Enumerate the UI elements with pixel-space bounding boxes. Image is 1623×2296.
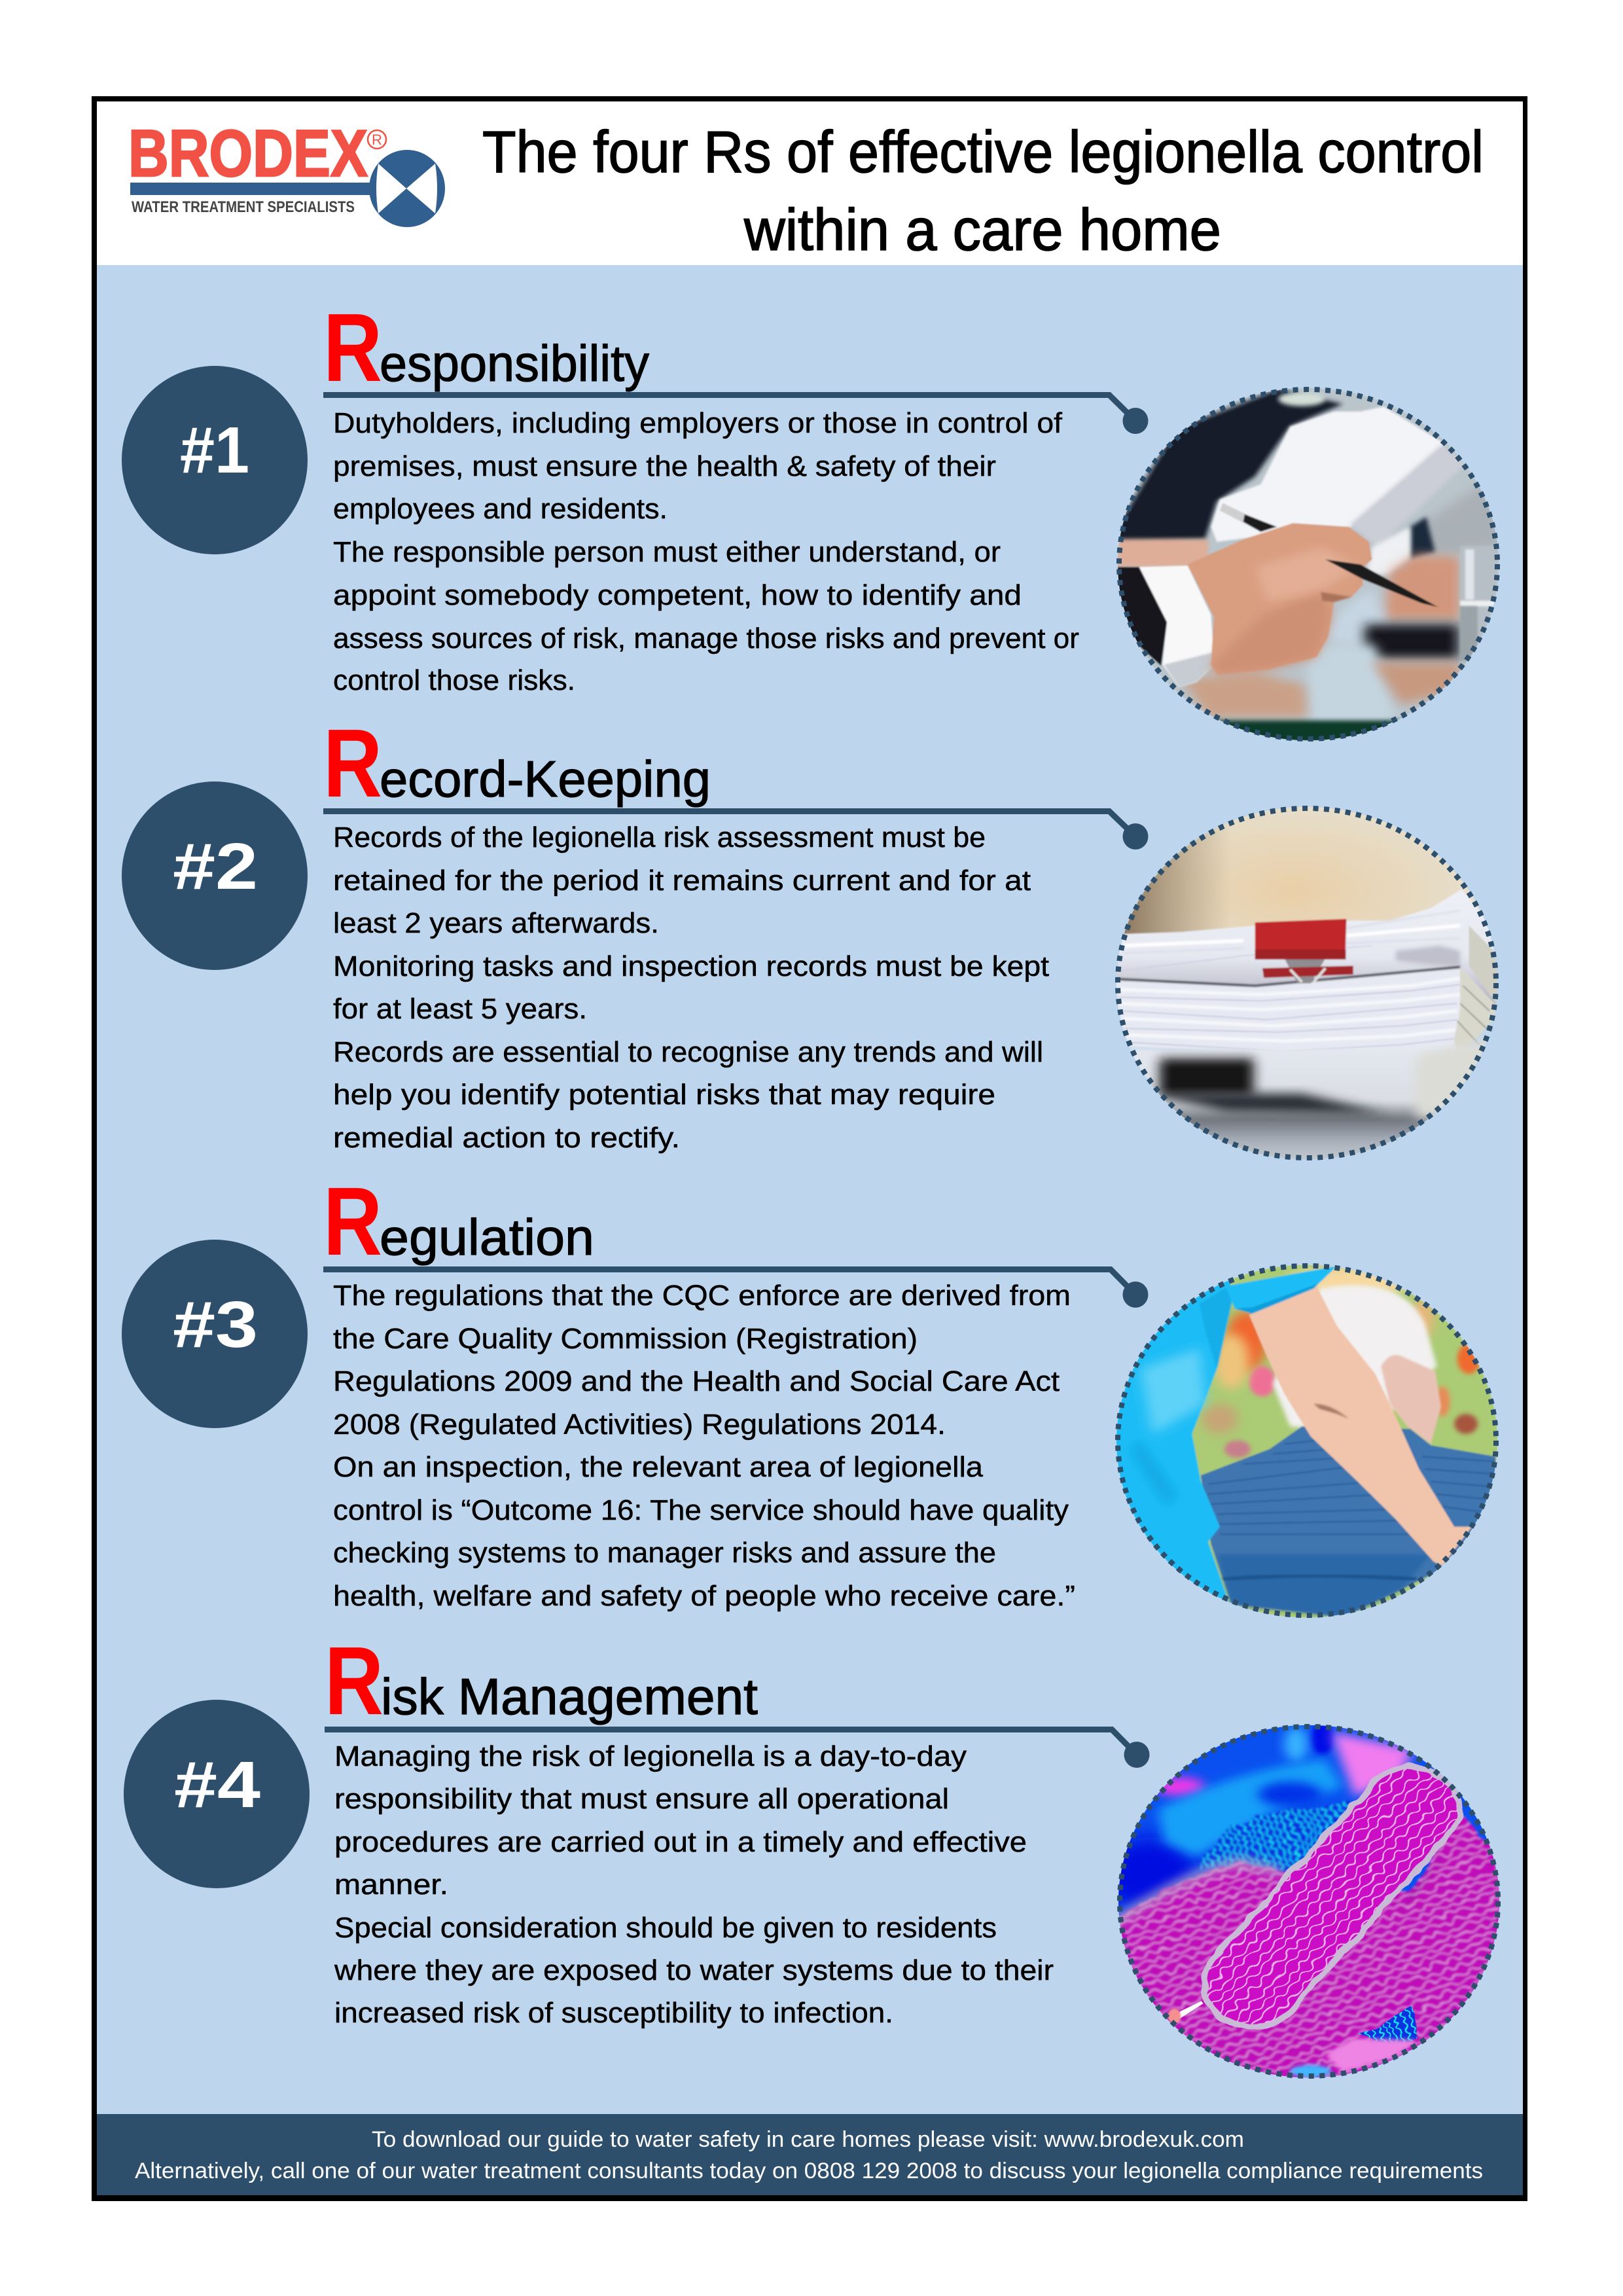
- number badge #3: [122, 1240, 308, 1428]
- number badge #3: #3: [173, 1288, 258, 1361]
- logo: Brodex: R: [372, 132, 382, 148]
- text block: risk management: Special consideration should be given to residents: [334, 1912, 997, 1944]
- text block: regulation: Regulations 2009 and the Health and Social Care Act: [333, 1365, 1060, 1397]
- text block: record-keeping: help you identify potential risks that may require: [333, 1079, 995, 1111]
- footer banner: [97, 2114, 1523, 2195]
- text block: responsibility: premises, must ensure the health & safety of their: [333, 450, 996, 482]
- dashed photo ring: [1119, 389, 1497, 739]
- title: within a care home: [743, 198, 1221, 263]
- logo: Brodex: WATER TREATMENT SPECIALISTS: [132, 198, 355, 216]
- text block: risk management: manner.: [334, 1869, 448, 1901]
- dashed photo ring: [1120, 1727, 1498, 2076]
- number badge #2: [122, 781, 308, 970]
- heading: Responsibility: R: [323, 294, 382, 402]
- panel: Regulation: [122, 1168, 1519, 1624]
- logo: Brodex: BRODEX: [128, 117, 368, 190]
- text block: risk management: where they are exposed to water systems due to their: [334, 1954, 1054, 1986]
- text block: record-keeping: [333, 821, 1049, 1154]
- title: [482, 120, 1484, 263]
- panel: Risk Management: [124, 1627, 1519, 2083]
- text block: risk management: Managing the risk of legionella is a day-to-day: [334, 1740, 967, 1772]
- panel: Responsibility: [122, 294, 1518, 747]
- connector line and dot: [325, 1729, 1149, 1768]
- dashed photo ring: [1118, 808, 1496, 1158]
- text block: regulation: The regulations that the CQC enforce are derived from: [333, 1280, 1071, 1312]
- connector line and dot: [323, 1270, 1148, 1308]
- text block: record-keeping: for at least 5 years.: [333, 993, 587, 1025]
- heading: Record-Keeping: R: [323, 709, 382, 817]
- text block: risk management: procedures are carried out in a timely and effective: [334, 1826, 1027, 1858]
- dashed photo ring: [1118, 1266, 1496, 1615]
- photo: carer's arm around an elderly resident: [1116, 1265, 1497, 1618]
- heading: Regulation: R: [323, 1168, 382, 1276]
- connector line and dot: [323, 812, 1148, 850]
- text block: responsibility: The responsible person must either understand, or: [333, 536, 1001, 568]
- heading: Regulation: egulation: [380, 1208, 594, 1266]
- text block: record-keeping: Records of the legionella risk assessment must be: [333, 821, 986, 853]
- photo: stack of papers with red clip: [1116, 806, 1497, 1160]
- text block: responsibility: control those risks.: [333, 664, 575, 696]
- text block: regulation: the Care Quality Commission (Registration): [333, 1323, 918, 1355]
- heading: Record-Keeping: ecord-Keeping: [380, 750, 711, 808]
- text block: record-keeping: least 2 years afterwards.: [333, 907, 659, 939]
- text block: record-keeping: Records are essential to recognise any trends and will: [333, 1036, 1043, 1068]
- text block: risk management: increased risk of susceptibility to infection.: [334, 1997, 893, 2029]
- text block: responsibility: [333, 407, 1079, 696]
- text block: regulation: control is “Outcome 16: The service should have quality: [333, 1494, 1069, 1526]
- heading: Record-Keeping: [323, 709, 711, 817]
- photo: legionella bacteria micrograph: [1118, 1725, 1499, 2077]
- text block: regulation: 2008 (Regulated Activities) Regulations 2014.: [333, 1408, 946, 1441]
- logo: Brodex: [128, 117, 445, 227]
- title: The four Rs of effective legionella control: [482, 120, 1484, 185]
- heading: Risk Management: isk Management: [381, 1668, 758, 1725]
- text block: responsibility: Dutyholders, including employers or those in control of: [333, 407, 1063, 439]
- text block: risk management: responsibility that must ensure all operational: [334, 1783, 949, 1815]
- footer banner: To download our guide to water safety in care homes please visit: www.brodexuk.com: [372, 2127, 1244, 2152]
- number badge #1: #1: [180, 414, 249, 487]
- heading: Regulation: [323, 1168, 594, 1276]
- panel: Record-Keeping: [122, 709, 1519, 1166]
- heading: Responsibility: esponsibility: [380, 334, 649, 392]
- text block: risk management: [334, 1740, 1054, 2029]
- text block: responsibility: assess sources of risk, manage those risks and prevent or: [333, 622, 1079, 655]
- heading: Risk Management: [325, 1627, 758, 1735]
- photo: hand holding pen over papers: [1118, 387, 1499, 741]
- text block: record-keeping: remedial action to rectify.: [333, 1122, 680, 1154]
- text block: record-keeping: Monitoring tasks and inspection records must be kept: [333, 950, 1049, 982]
- text block: regulation: health, welfare and safety of people who receive care.”: [333, 1580, 1075, 1612]
- text block: responsibility: appoint somebody competent, how to identify and: [333, 579, 1022, 611]
- text block: regulation: [333, 1280, 1075, 1612]
- heading: Responsibility: [323, 294, 649, 402]
- text block: record-keeping: retained for the period it remains current and for at: [333, 865, 1031, 897]
- connector line and dot: [323, 395, 1148, 434]
- footer banner: Alternatively, call one of our water treatment consultants today on 0808 129 2008 to discuss your legionella compliance requirements: [135, 2159, 1483, 2183]
- number badge #2: #2: [173, 830, 258, 903]
- text block: regulation: On an inspection, the relevant area of legionella: [333, 1451, 984, 1483]
- number badge #4: [124, 1700, 310, 1888]
- text block: regulation: checking systems to manager risks and assure the: [333, 1537, 996, 1569]
- number badge #1: [122, 366, 308, 554]
- number badge #4: #4: [174, 1748, 260, 1821]
- heading: Risk Management: R: [325, 1627, 383, 1735]
- text block: responsibility: employees and residents.: [333, 493, 668, 525]
